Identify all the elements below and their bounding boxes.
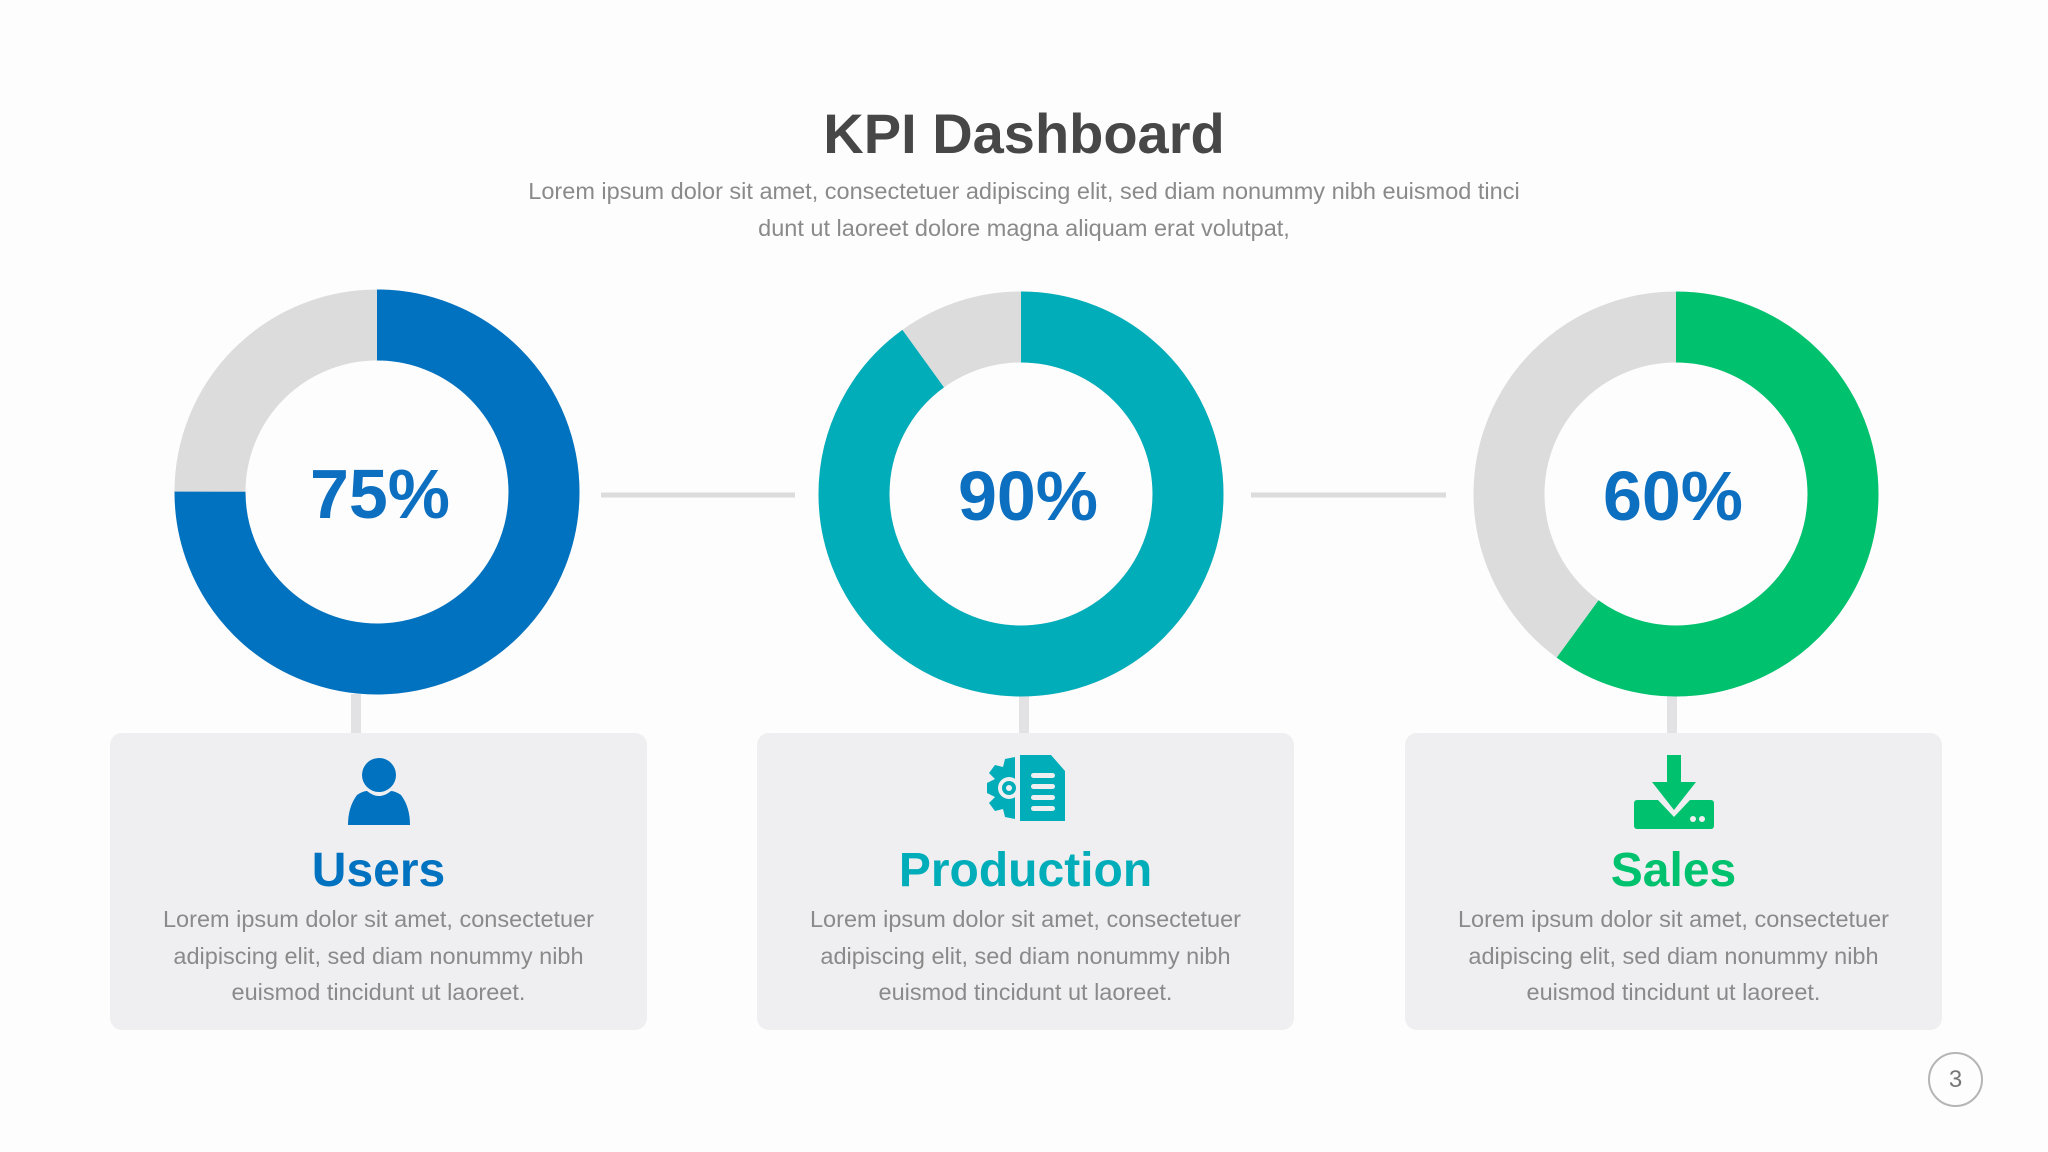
donut: users 75% bbox=[210, 325, 544, 659]
subtitle: dunt ut laoreet dolore magna aliquam erat volutpat, bbox=[758, 214, 1290, 240]
donut: sales 60% bbox=[1509, 327, 1843, 661]
vertical connector: users bbox=[351, 694, 361, 734]
connector line 2 bbox=[1251, 492, 1446, 498]
panel: production bbox=[757, 733, 1294, 1030]
heading: production: Production bbox=[899, 844, 1152, 897]
text: sales: euismod tincidunt ut laoreet. bbox=[1527, 979, 1820, 1005]
text: production bbox=[810, 906, 1241, 1005]
text: users: Lorem ipsum dolor sit amet, consectetuer bbox=[163, 906, 594, 932]
donut: sales 60%: 60% bbox=[1603, 457, 1743, 535]
text: production: adipiscing elit, sed diam nonummy nibh bbox=[820, 942, 1231, 968]
donut: users 75%: 75% bbox=[310, 455, 450, 533]
title: KPI Dashboard bbox=[823, 102, 1225, 165]
vertical connector: sales bbox=[1667, 694, 1677, 734]
page number: 3 bbox=[1949, 1066, 1962, 1093]
subtitle: Lorem ipsum dolor sit amet, consectetuer adipiscing elit, sed diam nonummy nibh euismod tinci bbox=[528, 178, 1520, 204]
heading: users: Users bbox=[312, 844, 445, 897]
text: production: Lorem ipsum dolor sit amet, consectetuer bbox=[810, 906, 1241, 932]
donut: production 90%: 90% bbox=[958, 457, 1098, 535]
vertical connector: production bbox=[1019, 694, 1029, 734]
icon: production gear document bbox=[987, 755, 1065, 821]
page number bbox=[1928, 1052, 1983, 1107]
text: users bbox=[163, 906, 594, 1005]
donut: production 90% bbox=[854, 327, 1188, 661]
panel: sales bbox=[1405, 733, 1942, 1030]
heading: sales: Sales bbox=[1611, 844, 1736, 897]
text: sales bbox=[1458, 906, 1889, 1005]
subtitle bbox=[528, 178, 1520, 241]
text: users: euismod tincidunt ut laoreet. bbox=[232, 979, 525, 1005]
text: sales: Lorem ipsum dolor sit amet, consectetuer bbox=[1458, 906, 1889, 932]
text: users: adipiscing elit, sed diam nonummy nibh bbox=[173, 942, 584, 968]
panel: users bbox=[110, 733, 647, 1030]
text: production: euismod tincidunt ut laoreet. bbox=[879, 979, 1172, 1005]
icon: user bbox=[348, 758, 410, 825]
icon: download bbox=[1634, 755, 1714, 829]
connector line 1 bbox=[601, 492, 795, 498]
text: sales: adipiscing elit, sed diam nonummy nibh bbox=[1468, 942, 1879, 968]
